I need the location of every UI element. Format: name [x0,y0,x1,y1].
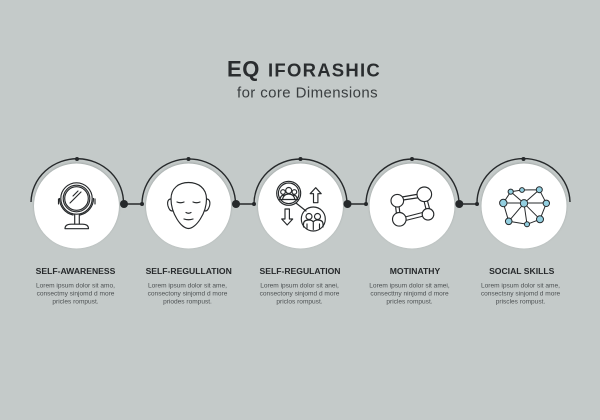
arc 3 [254,159,347,204]
connector 2 to 3 [232,200,256,208]
text block 1 [36,266,116,305]
text block 3 [260,266,340,305]
text block 1: SELF-AWARENESS [36,266,116,276]
circle 1: self-awareness [31,157,124,248]
arc 5 [477,159,570,204]
icon: network [500,187,550,227]
text block 1: consectmy sinjomd d more [37,290,115,297]
text block 2 [146,266,232,305]
text block 3: consectony sinjomd d more [260,290,340,297]
icon: linked nodes [391,187,434,226]
arc 1 [31,159,124,204]
icon: mirror [58,183,95,229]
text block 1: Lorem ipsum dolor sit amo, [36,282,115,289]
title: EQ [227,56,260,82]
circle 2: self-regulation [142,157,236,248]
circle 5: social skills [477,157,570,248]
top dot 5 [522,157,526,161]
text block 2: Lorem ipsum dolor sit ame, [148,282,227,289]
text block 4: pricles rompust. [386,298,433,305]
circle 4: motinathy [366,157,459,248]
title: IFORASHIC [268,60,381,80]
connector 1 to 2 [120,200,144,208]
text block 5: consectsny sinjomd d more [481,290,561,297]
arc 2 [142,159,236,204]
text block 2: consectony sinjomd d more [148,290,228,297]
text block 3: SELF-REGULATION [260,266,340,276]
text block 1: pricles rompust. [52,298,99,305]
top dot 2 [186,157,190,161]
text block 5 [481,266,561,305]
text block 4: Lorem ipsum dolor sit amei, [369,282,450,289]
top dot 4 [410,157,414,161]
text block 4: MOTINATHY [390,266,440,276]
text block 3: Lorem ipsum dolor sit anei, [260,282,339,289]
text block 5: Lorem ipsum dolor sit ame, [481,282,560,289]
text block 2: SELF-REGULLATION [146,266,232,276]
text block 5: priscles rompust. [496,298,545,305]
icon: groups and arrows [277,181,325,231]
text block 2: priodes rompust. [163,298,212,305]
top dot 3 [298,157,302,161]
subtitle: for core Dimensions [237,84,378,102]
text block 5: SOCIAL SKILLS [489,266,555,276]
connector 3 to 4 [344,200,368,208]
text block 4 [369,266,450,305]
circle 3: self-regulation [254,157,347,248]
icon: face [168,182,210,228]
connector 4 to 5 [455,200,479,208]
text block 4: consecttny ninjomd d more [370,290,449,297]
arc 4 [366,159,459,204]
top dot 1 [75,157,79,161]
text block 3: priclos rompust. [276,298,323,305]
